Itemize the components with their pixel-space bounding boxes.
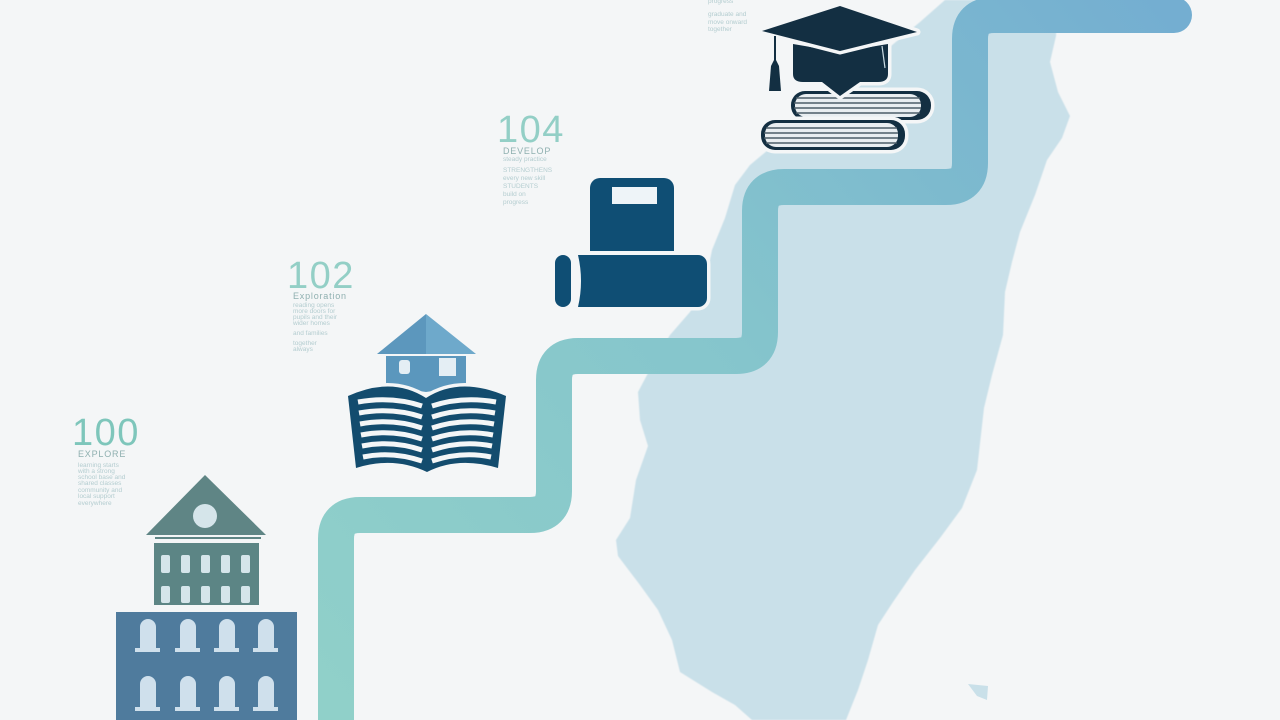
step 100: label: community and bbox=[78, 487, 122, 494]
step 104: label: build on bbox=[503, 191, 526, 198]
upright book bbox=[590, 178, 674, 251]
step 100: label: EXPLORE bbox=[78, 449, 126, 459]
step 104: label: DEVELOP bbox=[503, 146, 551, 156]
step 102: label: Exploration bbox=[293, 291, 347, 301]
roof bbox=[146, 475, 266, 535]
cap base bbox=[793, 44, 888, 96]
step 102: label: reading opens bbox=[293, 302, 335, 309]
step 104: label: 104 bbox=[497, 109, 565, 151]
step 100: label: school base and bbox=[78, 474, 126, 481]
step 104: label: progress bbox=[503, 199, 529, 206]
step 100: label: everywhere bbox=[78, 500, 112, 507]
step 104: label: STUDENTS bbox=[503, 183, 539, 190]
step 100: label: 100 bbox=[72, 412, 140, 454]
step 100: label: shared classes bbox=[78, 480, 122, 487]
step 102: label: 102 bbox=[287, 255, 355, 297]
step 100: label: learning starts bbox=[78, 462, 120, 469]
step 100: label: with a strong bbox=[77, 468, 115, 475]
step 102: label: and families bbox=[293, 330, 328, 337]
step 100: label bbox=[72, 412, 140, 507]
house roof bbox=[377, 314, 426, 354]
step 100: label: local support bbox=[78, 493, 115, 500]
lower book bbox=[761, 120, 905, 150]
icon: house on open book bbox=[348, 314, 506, 472]
stepped path bbox=[336, 15, 1174, 720]
step 102: label: wider homes bbox=[292, 320, 331, 327]
step 106: label, cropped at top bbox=[708, 0, 747, 33]
icon: books bbox=[555, 178, 707, 307]
mortarboard bbox=[762, 6, 917, 51]
step 102: label: more doors for bbox=[293, 308, 336, 315]
step 102: label: pupils and their bbox=[293, 314, 338, 321]
step 106: label, cropped at top: together bbox=[708, 26, 733, 33]
map islet bbox=[968, 684, 988, 700]
step 106: label, cropped at top: move onward bbox=[708, 19, 747, 26]
lying book bbox=[555, 255, 571, 307]
icon: school building bbox=[116, 475, 297, 720]
step 106: label, cropped at top: graduate and bbox=[708, 11, 747, 18]
step 102: label: together bbox=[293, 340, 318, 347]
upper book bbox=[791, 91, 931, 120]
icon: graduation cap on books bbox=[761, 6, 931, 150]
step 104: label: steady practice bbox=[503, 156, 547, 163]
upper storey bbox=[154, 543, 259, 605]
step 104: label bbox=[497, 109, 565, 206]
map silhouette bbox=[616, 0, 1070, 720]
tassel bbox=[774, 36, 776, 60]
step 102: label: always bbox=[293, 346, 314, 353]
step 104: label: STRENGTHENS bbox=[503, 167, 553, 174]
lower storey bbox=[116, 612, 297, 720]
house body bbox=[386, 356, 466, 392]
step 104: label: every new skill bbox=[503, 175, 546, 182]
open book bbox=[348, 386, 506, 472]
step 102: label bbox=[287, 255, 355, 353]
